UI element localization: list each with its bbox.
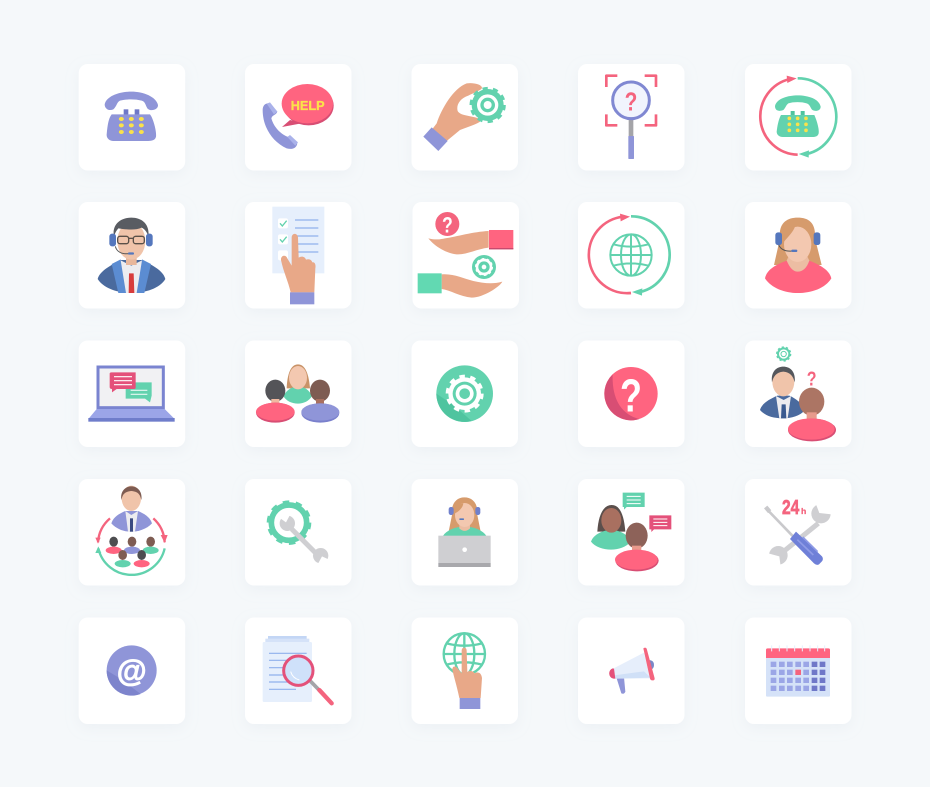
icon: checklist with pointing hand (272, 207, 324, 304)
icon: agent and customer question (760, 347, 836, 441)
icon: help call: HELP (291, 99, 325, 113)
icon: calendar (766, 645, 830, 697)
icon: help call (263, 84, 334, 149)
icon: 24h tools: h (801, 506, 806, 516)
icon: agent and customer question: ? (807, 368, 817, 390)
icon: gear badge (436, 365, 493, 422)
icon: 24h tools (766, 496, 833, 568)
icon: telephone (105, 92, 158, 141)
icon: male support agent (98, 218, 165, 293)
icon: phone with cycle arrows (760, 76, 836, 158)
icon: globe with cycle arrows (589, 214, 670, 296)
icon: document search (263, 636, 332, 703)
icon: female support agent (765, 218, 831, 293)
icon: agent at laptop (438, 497, 491, 567)
icon: 24h tools: 24 (782, 496, 799, 518)
icon: gear and wrench (268, 502, 331, 567)
icon: question badge: ? (620, 370, 642, 421)
icon: magnifier question: ? (625, 87, 637, 116)
icon: email badge (107, 645, 157, 696)
icon: hands with question and gear: ? (442, 214, 453, 238)
icon: three people (256, 364, 339, 423)
icon: two people chatting (591, 493, 671, 571)
icon: question badge (604, 367, 658, 421)
icon: email badge: @ (117, 654, 147, 688)
icon: hands with question and gear (418, 212, 513, 298)
icon: magnifier question (606, 76, 656, 159)
icon: manager and team cycle (95, 486, 168, 575)
icon: globe touch (444, 633, 485, 709)
icon: megaphone (609, 648, 655, 694)
icon: laptop chat (88, 367, 175, 422)
icon: hand holding gear (423, 83, 504, 151)
